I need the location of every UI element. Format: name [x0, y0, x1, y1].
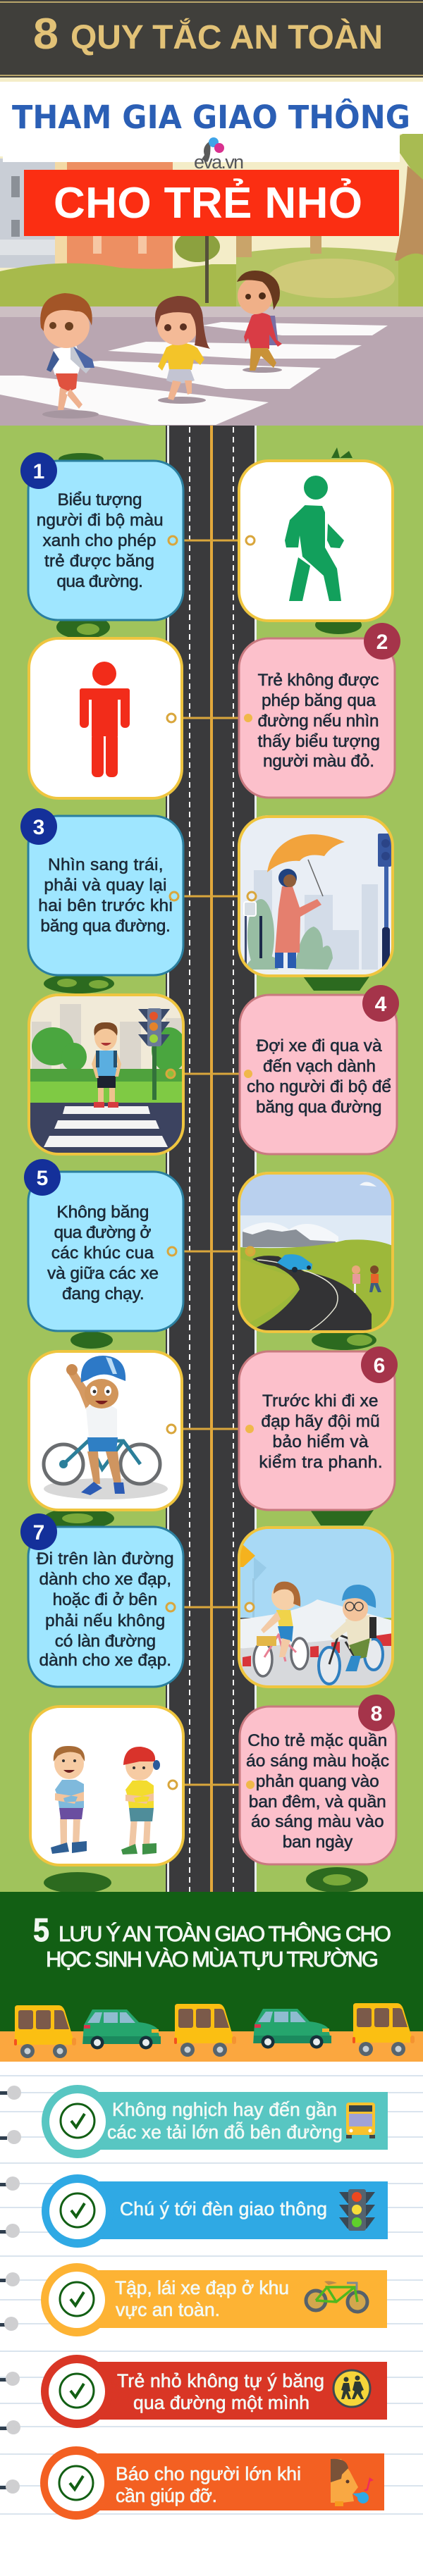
girl on bicycle — [254, 1582, 308, 1676]
check icon — [48, 2455, 104, 2511]
umbrella — [267, 834, 345, 896]
green ground — [0, 426, 423, 1892]
badge 6: 6 — [374, 1354, 385, 1377]
vehicle: green car 1 — [82, 2010, 161, 2049]
title line 1: QUY TẮC AN TOÀN — [70, 18, 383, 56]
banner 3 copy — [115, 2277, 289, 2320]
rule 2 copy: thấy biểu tượng — [258, 732, 380, 751]
panel: rule 6 text — [239, 1346, 398, 1510]
connector row 6 — [175, 1428, 247, 1430]
road — [0, 317, 423, 426]
road — [166, 426, 257, 1892]
banner 2: blue — [42, 2174, 388, 2248]
rule 1 copy: qua đường. — [56, 572, 143, 591]
panel: rule 1 image, green pedestrian — [239, 461, 393, 621]
connector row 4 — [174, 1072, 246, 1075]
rule 7 copy: dành cho xe đạp, — [39, 1570, 171, 1589]
badge 6 — [361, 1346, 398, 1383]
icon: green walking figure — [285, 476, 344, 601]
rule 6 copy — [259, 1392, 383, 1472]
rule 7 copy: dành cho xe đạp. — [39, 1651, 171, 1670]
panel: rule 7 text — [20, 1513, 183, 1687]
building: orange — [55, 159, 173, 273]
banner 5 copy — [116, 2463, 301, 2506]
banner 3 copy: Tập, lái xe đạp ở khu — [115, 2277, 289, 2298]
icon: bicycle — [306, 2281, 367, 2312]
badge 1: 1 — [33, 460, 44, 483]
panel: section banner green — [0, 1892, 423, 2062]
icon: face with whistle — [331, 2459, 374, 2506]
badge 2: 2 — [376, 631, 388, 654]
section heading: LƯU Ý AN TOÀN GIAO THÔNG CHO — [59, 1921, 391, 1946]
panel: rule 1 text — [20, 452, 183, 620]
rule 8 copy: phản quang vào — [256, 1772, 379, 1791]
badge 7 — [20, 1513, 57, 1550]
rule 1 copy: người đi bộ màu — [37, 511, 164, 530]
notebook lines — [0, 2076, 423, 2514]
rule 4 copy — [247, 1036, 391, 1117]
banner 1 copy: các xe tải lớn đỗ bên đường — [107, 2122, 343, 2143]
white title band — [0, 82, 423, 162]
sign left — [244, 902, 262, 965]
icon: school crossing sign — [333, 2370, 370, 2407]
panel: rule 7 image, children cycling — [239, 1526, 393, 1687]
child: back — [237, 271, 282, 373]
rule 3 copy: băng qua đường. — [40, 917, 171, 936]
panel: rule 4 text — [240, 985, 399, 1154]
boy on bicycle — [319, 1585, 383, 1684]
banner 4 copy: Trẻ nhỏ không tự ý băng — [117, 2370, 324, 2391]
rule 1 copy — [37, 490, 164, 591]
banner 1: teal — [42, 2085, 388, 2158]
boy — [92, 1022, 121, 1108]
rule 7 copy: hoặc đi ở bên — [53, 1590, 157, 1609]
vehicle: green car 2 — [253, 2009, 331, 2049]
banner 3 copy: vực an toàn. — [116, 2299, 220, 2320]
rule 5 copy: các khúc cua — [51, 1244, 154, 1263]
boy with bicycle — [44, 1356, 168, 1499]
rule 6 copy: Trước khi đi xe — [262, 1392, 378, 1411]
street pole — [205, 233, 209, 303]
rule 8 copy: áo sáng màu vào — [251, 1812, 384, 1831]
traffic signal — [378, 834, 391, 970]
logo: eva.vn: eva.vn — [194, 151, 244, 173]
panel: rule 5 image, curved road — [239, 1172, 393, 1332]
title line 3: CHO TRẺ NHỎ — [54, 179, 362, 228]
banner 5: orange — [40, 2446, 384, 2520]
rule 8 copy — [246, 1731, 389, 1852]
child: left — [40, 293, 99, 419]
title line 1 — [33, 10, 383, 58]
rule 5 copy — [47, 1203, 159, 1304]
hedge left — [0, 264, 236, 306]
badge 5: 5 — [37, 1167, 48, 1190]
connector row 3 — [178, 895, 249, 898]
panel: rule 6 image, boy with bicycle — [29, 1351, 182, 1510]
pavement — [0, 306, 423, 318]
building: grey — [0, 159, 55, 268]
badge 2 — [364, 623, 400, 660]
title line 1: 8 — [33, 10, 59, 58]
panel: rule 3 text — [20, 808, 183, 975]
rule 6 copy: kiểm tra phanh. — [259, 1453, 383, 1472]
rule 4 copy: Đợi xe đi qua và — [257, 1036, 382, 1055]
header scene: children on crosswalk — [0, 78, 423, 426]
rule 5 copy: qua đường ở — [54, 1223, 151, 1242]
rule 2 copy: phép băng qua — [262, 691, 376, 710]
child: middle — [155, 296, 210, 404]
background trees and hedge right — [236, 128, 423, 306]
rule 5 copy: Không băng — [56, 1203, 149, 1222]
banner 4: red — [41, 2355, 387, 2428]
badge 4: 4 — [375, 993, 387, 1016]
rule 1 copy: Biểu tượng — [58, 490, 142, 509]
rule 3 copy: Nhìn sang trái, — [48, 855, 164, 874]
red title box — [24, 170, 399, 236]
connector row 5 — [176, 1250, 247, 1253]
banner 3: amber — [41, 2263, 387, 2336]
traffic light — [138, 1008, 170, 1100]
crosswalk stripes — [0, 322, 388, 425]
rule 8 copy: áo sáng màu hoặc — [246, 1752, 389, 1771]
boy in blue — [51, 1746, 87, 1854]
rule 2 copy: Trẻ không được — [258, 671, 379, 690]
rule 5 copy: và giữa các xe — [47, 1264, 159, 1283]
section heading: 5 — [33, 1912, 49, 1948]
banner 4 copy: qua đường một mình — [133, 2392, 309, 2413]
badge 3: 3 — [33, 816, 44, 839]
check icon — [49, 2183, 106, 2239]
rule 4 copy: cho người đi bộ để — [247, 1077, 391, 1096]
banner 1 copy — [107, 2099, 343, 2143]
panel: rule 4 image, boy at crossing — [29, 993, 187, 1154]
rule 7 copy — [37, 1549, 174, 1670]
tree behind pole — [175, 231, 220, 262]
icon: bus — [346, 2103, 375, 2138]
icon: traffic light — [339, 2189, 375, 2231]
title line 2: THAM GIA GIAO THÔNG — [12, 99, 410, 136]
notebook binder rings — [0, 2086, 21, 2494]
rule 8 copy: Cho trẻ mặc quần — [247, 1731, 387, 1750]
connector row 1 — [176, 540, 247, 541]
logo: eva.vn — [194, 137, 244, 173]
rule 1 copy: trẻ được băng — [44, 552, 154, 571]
panel: rule 2 text — [239, 623, 400, 798]
badge 4 — [362, 985, 399, 1022]
rule 2 copy: đường nếu nhìn — [258, 712, 379, 731]
person — [275, 869, 321, 968]
badge 7: 7 — [33, 1521, 44, 1544]
badge 5 — [24, 1159, 61, 1196]
rule 3 copy — [38, 855, 173, 936]
panel: rule 8 image, two boys — [30, 1707, 183, 1865]
boy in yellow — [121, 1747, 160, 1854]
rule 8 copy: ban ngày — [283, 1833, 353, 1852]
vehicle: yellow bus 1 — [14, 2005, 76, 2058]
panel: rule 5 text — [24, 1159, 183, 1331]
bushes between cards — [44, 447, 376, 1893]
badge 8: 8 — [371, 1702, 382, 1726]
banner 4 copy — [117, 2370, 324, 2413]
rule 5 copy: đang chạy. — [62, 1284, 145, 1304]
panel: rule 3 image, person with umbrella — [239, 815, 393, 976]
rule 6 copy: bảo hiểm và — [272, 1432, 369, 1451]
section heading: HỌC SINH VÀO MÙA TỰU TRƯỜNG — [46, 1947, 379, 1971]
section heading — [33, 1912, 391, 1971]
rule 3 copy: phải và quay lại — [44, 876, 166, 895]
connector row 7 — [174, 1606, 247, 1608]
rule 7 copy: có làn đường — [55, 1632, 156, 1651]
rule 2 copy: người màu đỏ. — [263, 752, 374, 771]
connector row 8 — [176, 1784, 247, 1785]
banner 1 copy: Không nghịch hay đến gần — [112, 2099, 337, 2120]
dark title band — [0, 0, 423, 78]
banner 5 copy: cần giúp đỡ. — [116, 2485, 217, 2506]
rule 1 copy: xanh cho phép — [42, 531, 157, 550]
connector row 2 — [175, 717, 246, 719]
icon: red standing figure — [80, 662, 130, 777]
rule 2 copy — [258, 671, 380, 771]
panel: rule 2 image, red figure — [29, 638, 182, 798]
check icon — [49, 2272, 105, 2328]
panel: rule 8 text — [240, 1695, 396, 1864]
vehicle: yellow bus 3 — [352, 2003, 415, 2056]
rule 7 copy: Đi trên làn đường — [37, 1549, 174, 1568]
rule 7 copy: phải nếu không — [45, 1611, 165, 1630]
vehicle: yellow bus 2 — [174, 2004, 236, 2057]
rule 4 copy: đến vạch dành — [263, 1057, 376, 1076]
badge 8 — [358, 1695, 395, 1731]
check icon — [49, 2093, 106, 2150]
banner 2 copy: Chú ý tới đèn giao thông — [120, 2198, 327, 2219]
rule 8 copy: ban đêm, và quần — [249, 1792, 386, 1812]
rule 6 copy: đạp hãy đội mũ — [261, 1412, 380, 1431]
rule 4 copy: băng qua đường — [256, 1098, 382, 1117]
rule 3 copy: hai bên trước khi — [38, 896, 173, 915]
badge 1 — [20, 452, 57, 489]
check icon — [49, 2363, 105, 2420]
badge 3 — [20, 808, 57, 845]
banner 5 copy: Báo cho người lớn khi — [116, 2463, 301, 2484]
children — [352, 1265, 381, 1293]
